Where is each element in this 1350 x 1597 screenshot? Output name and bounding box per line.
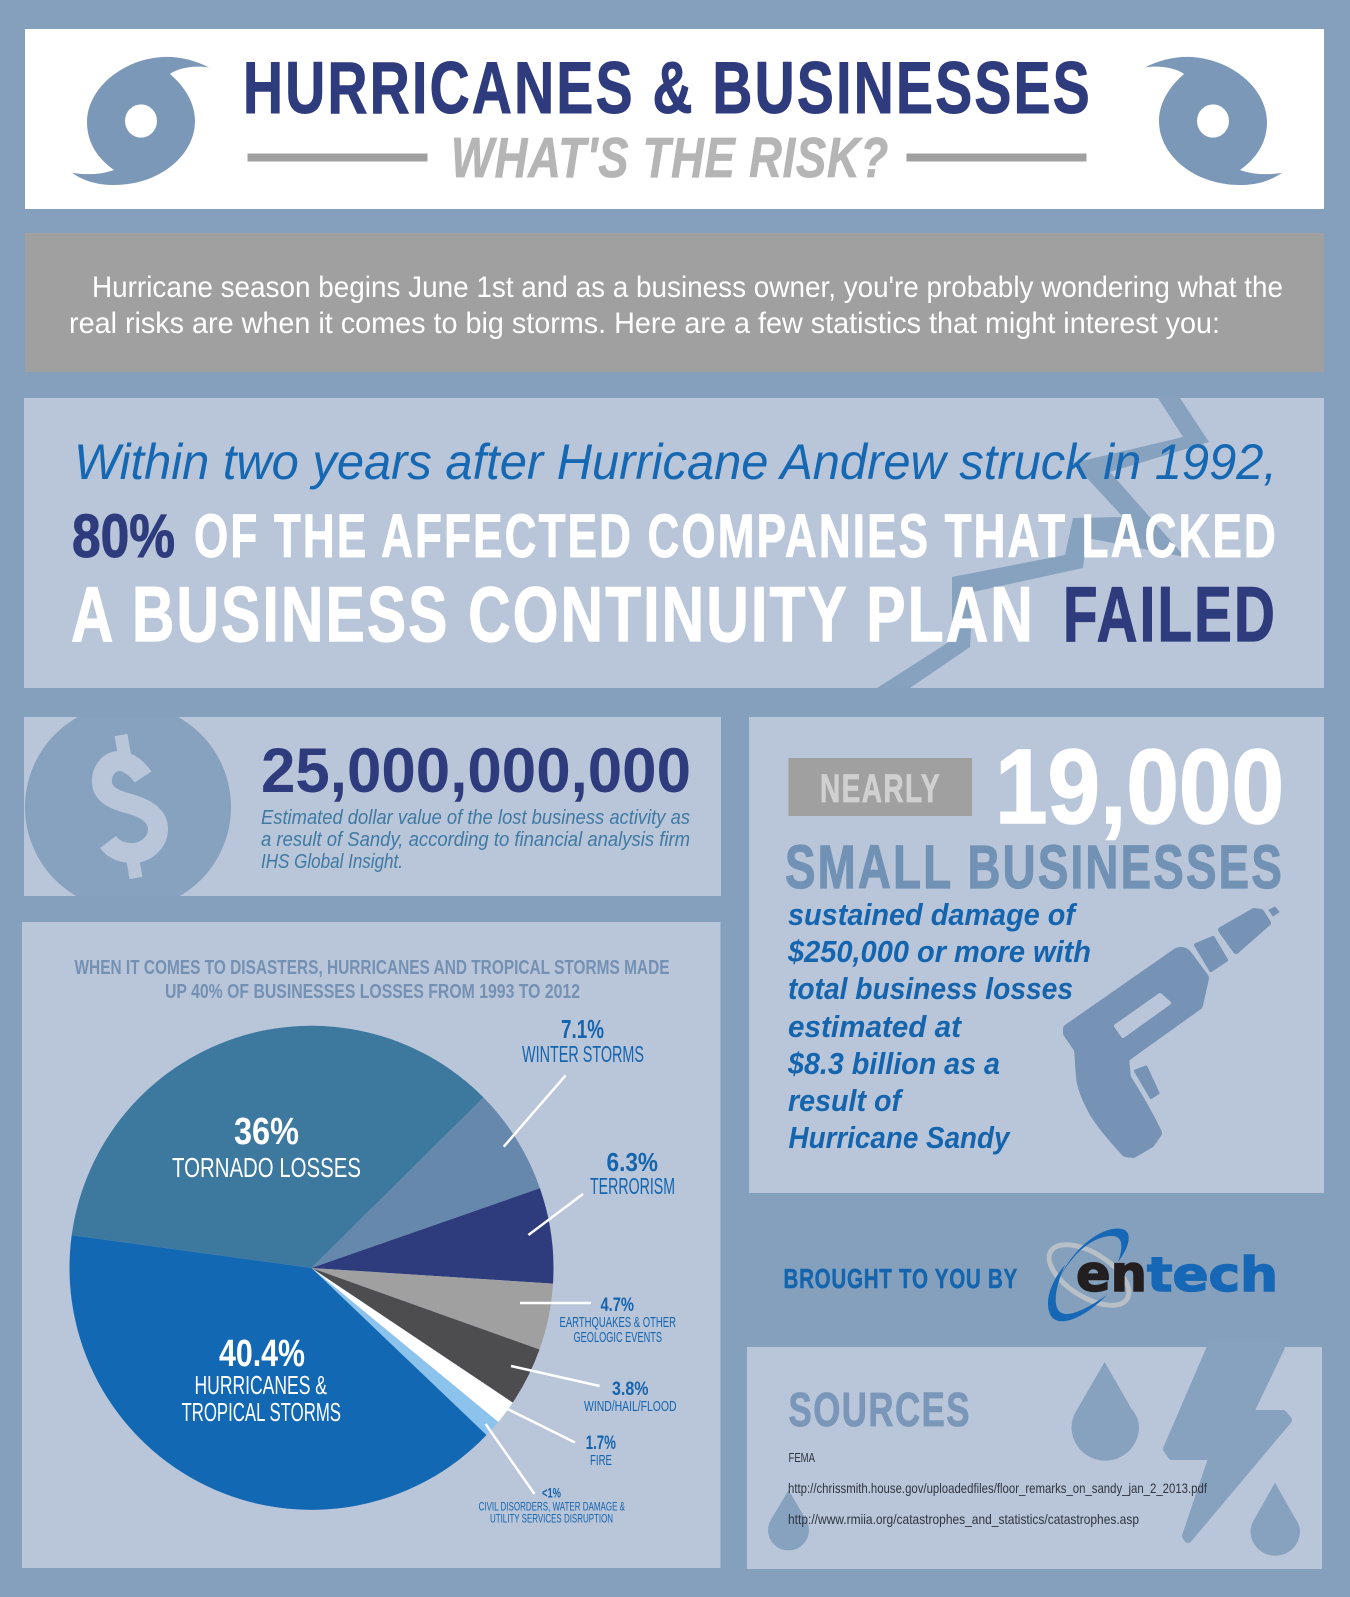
slice label: tornado losses: 36% [234, 1111, 299, 1153]
headline line 3: A BUSINESS CONTINUITY PLAN [71, 570, 1035, 658]
callout: civil disorders: <1% [542, 1485, 561, 1501]
callout: terrorism: 6.3% [606, 1147, 658, 1177]
icon: right hurricane [1145, 57, 1282, 185]
nearly badge: NEARLY [820, 767, 941, 811]
callout: fire: 1.7% [586, 1433, 616, 1454]
damage text: total business losses [788, 971, 1073, 1006]
chart heading [74, 957, 670, 1003]
icon: drill [1068, 907, 1279, 1153]
callout: wind, hail, flood: WIND/HAIL/FLOOD [584, 1398, 677, 1415]
description: Estimated dollar value of the lost business activity as [261, 807, 690, 829]
icon: large water drop [1072, 1362, 1139, 1461]
subtitle [248, 126, 1086, 190]
intro text: real risks are when it comes to big storms. Here are a few statistics that might interest you: [69, 307, 1220, 340]
callout: civil disorders: UTILITY SERVICES DISRUPTION [490, 1514, 613, 1526]
damage text [787, 897, 1091, 1155]
icon: lightning bolt [877, 398, 1209, 688]
callout: civil disorders: CIVIL DISORDERS, WATER DAMAGE & [479, 1502, 625, 1514]
sponsor label: BROUGHT TO YOU BY [784, 1263, 1018, 1294]
damage text: sustained damage of [788, 897, 1077, 932]
sources list: FEMA [788, 1450, 815, 1465]
callout: fire [508, 1409, 616, 1469]
logo: entech: tech [1147, 1248, 1278, 1303]
callout: terrorism: TERRORISM [590, 1173, 675, 1199]
panel: pie chart of disaster losses [22, 922, 720, 1568]
slice label: hurricanes and tropical storms: HURRICANES & [194, 1370, 327, 1400]
damage text: estimated at [788, 1009, 963, 1044]
slice label: hurricanes and tropical storms: TROPICAL STORMS [182, 1397, 341, 1427]
intro text: Hurricane season begins June 1st and as a business owner, you're probably wondering what the [92, 271, 1283, 304]
callout: earthquakes: GEOLOGIC EVENTS [574, 1329, 662, 1346]
icon: right water drop [1250, 1483, 1300, 1556]
title: HURRICANES & BUSINESSES [243, 48, 1092, 129]
big number: 25,000,000,000 [261, 736, 691, 806]
subtitle: WHAT'S THE RISK? [451, 126, 889, 190]
headline line 1: Within two years after Hurricane Andrew struck in 1992, [74, 434, 1277, 490]
description: IHS Global Insight. [261, 851, 403, 873]
icon: left water drop [768, 1490, 809, 1550]
icon: large lightning bolt [1167, 1347, 1288, 1539]
icon: dollar coin [25, 717, 231, 896]
sources heading: SOURCES [788, 1384, 971, 1437]
slice label: hurricanes and tropical storms [182, 1333, 341, 1427]
sources list [788, 1450, 1207, 1527]
panel: small businesses [749, 717, 1324, 1193]
callout: earthquakes [520, 1295, 676, 1346]
damage text: result of [788, 1083, 903, 1118]
panel: dollar value lost [24, 717, 721, 896]
damage text: Hurricane Sandy [788, 1120, 1011, 1155]
panel: sources [747, 1347, 1322, 1569]
nearly badge [788, 758, 972, 816]
panel: title banner [25, 29, 1324, 209]
description [261, 807, 690, 873]
callout: wind, hail, flood: 3.8% [612, 1379, 649, 1400]
intro text [69, 271, 1283, 340]
headline line 3: FAILED [1063, 570, 1277, 658]
icon: left hurricane [72, 57, 209, 185]
sources list: http://www.rmiia.org/catastrophes_and_statistics/catastrophes.asp [788, 1511, 1139, 1527]
slice label: tornado losses: TORNADO LOSSES [172, 1152, 361, 1183]
logo: entech: en [1076, 1245, 1147, 1303]
damage text: $8.3 billion as a [787, 1046, 1000, 1081]
callout: winter storms: WINTER STORMS [522, 1041, 644, 1067]
chart heading: UP 40% OF BUSINESSES LOSSES FROM 1993 TO 2012 [165, 981, 580, 1003]
callout: earthquakes: EARTHQUAKES & OTHER [560, 1314, 676, 1331]
panel: introduction [25, 233, 1324, 372]
callout: terrorism [528, 1147, 675, 1235]
callout: civil disorders [479, 1424, 625, 1526]
callout: winter storms [504, 1014, 644, 1147]
pie chart [69, 1026, 553, 1510]
sources list: http://chrissmith.house.gov/uploadedfiles/floor_remarks_on_sandy_jan_2_2013.pdf [788, 1480, 1207, 1496]
chart heading: WHEN IT COMES TO DISASTERS, HURRICANES AND TROPICAL STORMS MADE [74, 957, 670, 979]
sponsor credit [784, 1228, 1278, 1321]
callout: fire: FIRE [590, 1452, 612, 1469]
logo: entech [1039, 1228, 1278, 1321]
slice label: tornado losses [172, 1111, 361, 1183]
big number: 19,000 [995, 728, 1284, 846]
callout: wind, hail, flood [511, 1366, 677, 1415]
description: a result of Sandy, according to financial analysis firm [261, 829, 690, 851]
callout: winter storms: 7.1% [561, 1014, 604, 1044]
headline line 2: 80% [72, 502, 175, 570]
panel: Hurricane Andrew statistic [24, 398, 1324, 688]
slice label: hurricanes and tropical storms: 40.4% [219, 1333, 305, 1375]
callout: earthquakes: 4.7% [600, 1295, 634, 1316]
damage text: $250,000 or more with [787, 934, 1091, 969]
